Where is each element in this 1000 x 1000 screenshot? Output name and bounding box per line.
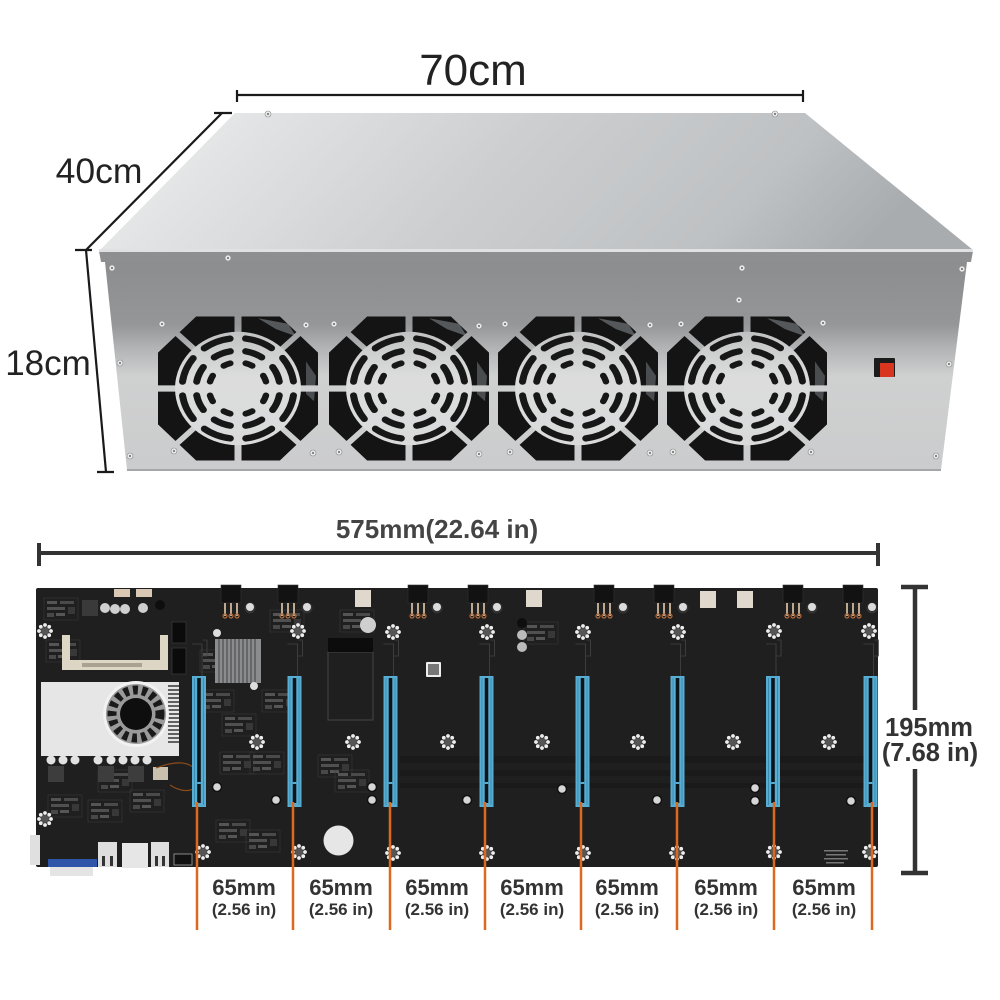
QR label — [426, 662, 441, 677]
panel: chassis illustration — [99, 111, 973, 471]
power connectors — [221, 585, 878, 618]
dimension: 40cm depth: 40cm — [56, 151, 142, 191]
slot spacing labels: 65mm — [212, 875, 276, 900]
dimension: 40cm depth — [56, 113, 232, 250]
slot spacing labels: (2.56 in) — [309, 900, 373, 919]
dimension: 195mm board height: (7.68 in) — [882, 739, 978, 767]
dimension: 18cm height: 18cm — [5, 344, 91, 383]
dimension: 195mm board height — [882, 587, 978, 873]
slot spacing labels — [212, 875, 856, 919]
capacitor row and chokes — [46, 756, 198, 791]
orange slot spacing lines — [197, 802, 872, 930]
small capacitor cluster — [517, 618, 527, 652]
dimension: 195mm board height: 195mm — [885, 714, 973, 742]
circuit component clusters — [44, 598, 558, 852]
fan grille 4 — [667, 316, 827, 460]
fan headers — [355, 590, 753, 608]
chassis screws — [109, 111, 965, 459]
CPU heatsink with fan — [41, 681, 179, 756]
slot spacing labels: 65mm — [792, 875, 856, 900]
PCIe slots — [192, 640, 878, 807]
icon: red power switch — [874, 358, 895, 377]
slot spacing labels: 65mm — [694, 875, 758, 900]
regulatory print — [824, 850, 848, 864]
dimension: 70cm width: 70cm — [419, 46, 527, 95]
M.2 slot outline — [328, 617, 376, 720]
inductors and capacitors top left — [82, 600, 165, 616]
dimension: 575mm board width: 575mm(22.64 in) — [336, 514, 538, 544]
rear IO ports — [30, 835, 192, 876]
slot spacing labels: (2.56 in) — [500, 900, 564, 919]
board substrate — [36, 588, 878, 867]
chassis front face — [99, 249, 973, 471]
fan grille 1 — [158, 316, 318, 460]
board traces — [400, 756, 870, 788]
slot spacing labels: (2.56 in) — [212, 900, 276, 919]
slot spacing labels: 65mm — [500, 875, 564, 900]
chassis top face — [99, 113, 973, 251]
small capacitors by slots — [212, 782, 856, 806]
slot spacing labels: 65mm — [405, 875, 469, 900]
chipset heatsink — [213, 629, 261, 690]
DDR memory slot — [62, 635, 168, 670]
slot spacing labels: (2.56 in) — [792, 900, 856, 919]
fan grille 2 — [329, 316, 489, 460]
fan grille 3 — [498, 316, 658, 460]
slot spacing labels: 65mm — [309, 875, 373, 900]
dimension: 70cm width — [237, 46, 803, 102]
slot spacing labels: 65mm — [595, 875, 659, 900]
CMOS battery — [324, 826, 354, 856]
slot spacing labels: (2.56 in) — [405, 900, 469, 919]
SATA connectors — [172, 622, 186, 674]
slot spacing labels: (2.56 in) — [595, 900, 659, 919]
mounting holes — [37, 623, 878, 861]
dimension: 575mm board width — [39, 514, 878, 566]
slot spacing labels: (2.56 in) — [694, 900, 758, 919]
dimension: 18cm height — [5, 250, 114, 472]
white 2-pin headers — [114, 589, 152, 597]
panel: motherboard — [30, 585, 878, 876]
